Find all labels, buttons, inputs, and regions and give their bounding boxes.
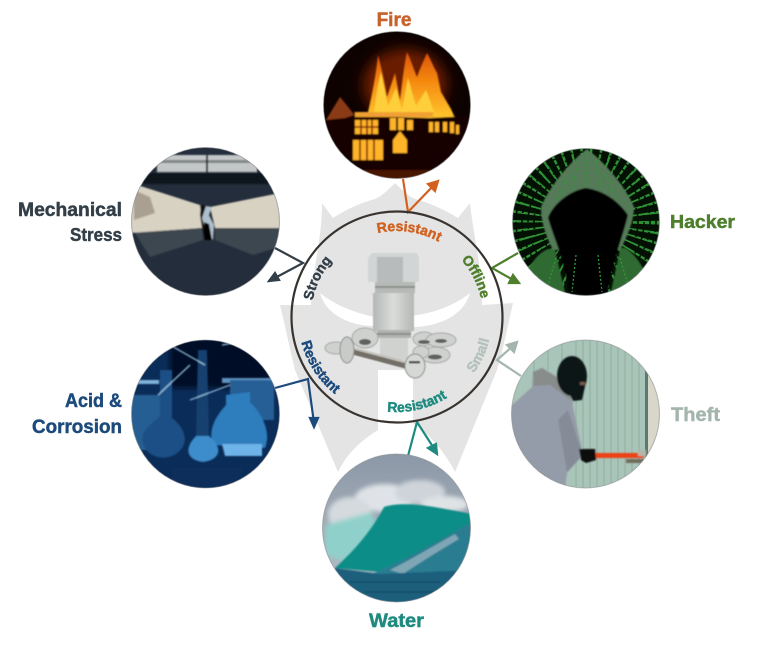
label: hacker: Hacker (670, 212, 735, 232)
panel: fire photo (324, 32, 470, 178)
arrow: theft (497, 342, 521, 376)
label: fire: Fire (377, 10, 411, 31)
label: resistant fire: Resistant (376, 221, 442, 242)
label: resistant acid: Resistant (301, 340, 340, 394)
label: acid and corrosion (32, 391, 122, 438)
panel: hacker photo (510, 146, 662, 300)
label: mechanical stress (18, 200, 122, 245)
arrow: mechanical stress (269, 248, 303, 281)
label: mechanical stress: Stress (70, 224, 122, 245)
label: theft: Theft (671, 405, 721, 426)
arrow: fire (403, 179, 438, 212)
label: acid and corrosion: Corrosion (32, 417, 122, 438)
label: strong: Strong (304, 256, 333, 300)
visor cutouts of logo (320, 293, 470, 327)
thin circle outlines (132, 32, 660, 602)
arrow: water (408, 422, 437, 456)
panel: water photo (320, 452, 474, 606)
label: offline: Offline (463, 256, 488, 298)
arrow: hacker (492, 253, 519, 283)
label: resistant water: Resistant (388, 390, 448, 412)
background logo watermark (280, 183, 513, 472)
panel: mechanical stress photo (130, 146, 282, 298)
panel: theft photo (510, 338, 662, 490)
label: small: Small (467, 338, 490, 372)
label: mechanical stress: Mechanical (18, 200, 122, 221)
panel: acid and corrosion photo (130, 338, 282, 490)
arrow: acid (275, 379, 318, 427)
icon: bolt and washers (325, 253, 456, 378)
central circle (290, 210, 504, 424)
label: water: Water (369, 611, 425, 632)
label: acid and corrosion: Acid & (65, 391, 122, 412)
